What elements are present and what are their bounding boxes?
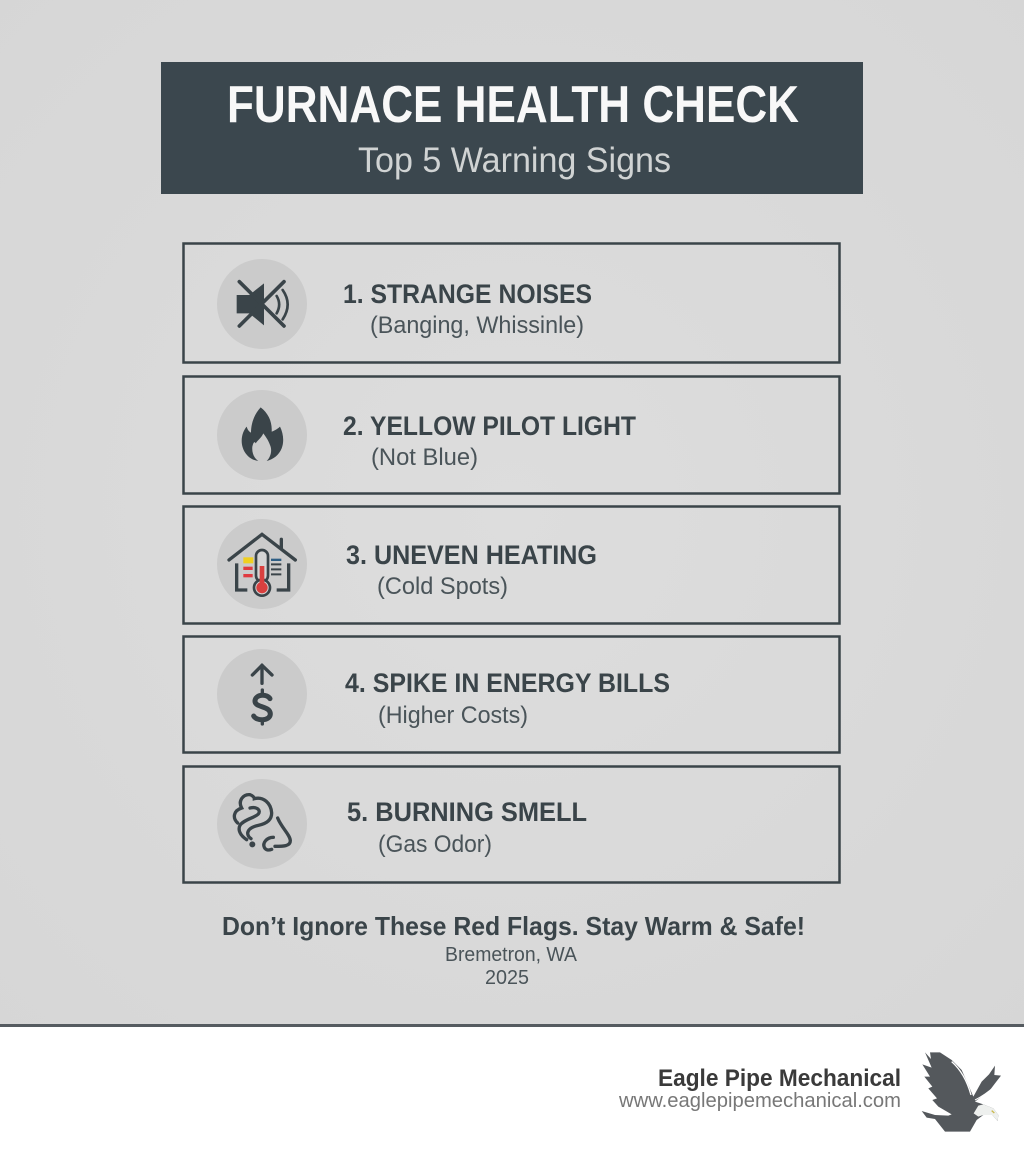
icon: dollar with up arrow: [217, 649, 307, 739]
company name: Eagle Pipe Mechanical: [658, 1065, 901, 1092]
icon: flame: [217, 390, 307, 480]
year: 2025: [485, 967, 529, 989]
icon: smoke and nose: [217, 779, 307, 869]
description: (Banging, Whissinle): [370, 312, 584, 339]
title: FURNACE HEALTH CHECK: [227, 76, 799, 134]
description: (Gas Odor): [378, 831, 492, 858]
subtitle: Top 5 Warning Signs: [358, 141, 671, 180]
heading: 4. SPIKE IN ENERGY BILLS: [345, 668, 670, 698]
panel: spike in energy bills: [184, 636, 840, 752]
description: (Not Blue): [371, 444, 478, 471]
heading: 3. UNEVEN HEATING: [346, 540, 597, 570]
location: Bremetron, WA: [445, 944, 578, 966]
footer panel: [0, 1024, 1024, 1154]
panel: uneven heating: [184, 506, 840, 624]
icon: eagle logo: [922, 1052, 1001, 1132]
description: (Higher Costs): [378, 702, 528, 729]
callout: Don’t Ignore These Red Flags. Stay Warm & Safe!: [222, 911, 805, 941]
panel: yellow pilot light: [184, 376, 840, 494]
description: (Cold Spots): [377, 573, 508, 600]
title banner: [161, 62, 863, 194]
panel: strange noises: [184, 244, 840, 362]
icon: house thermometer: [217, 519, 307, 609]
icon: muted speaker: [217, 259, 307, 349]
heading: 2. YELLOW PILOT LIGHT: [343, 411, 636, 441]
panel: burning smell: [184, 766, 840, 882]
website: www.eaglepipemechanical.com: [618, 1090, 901, 1112]
heading: 5. BURNING SMELL: [347, 797, 587, 827]
heading: 1. STRANGE NOISES: [343, 279, 592, 309]
